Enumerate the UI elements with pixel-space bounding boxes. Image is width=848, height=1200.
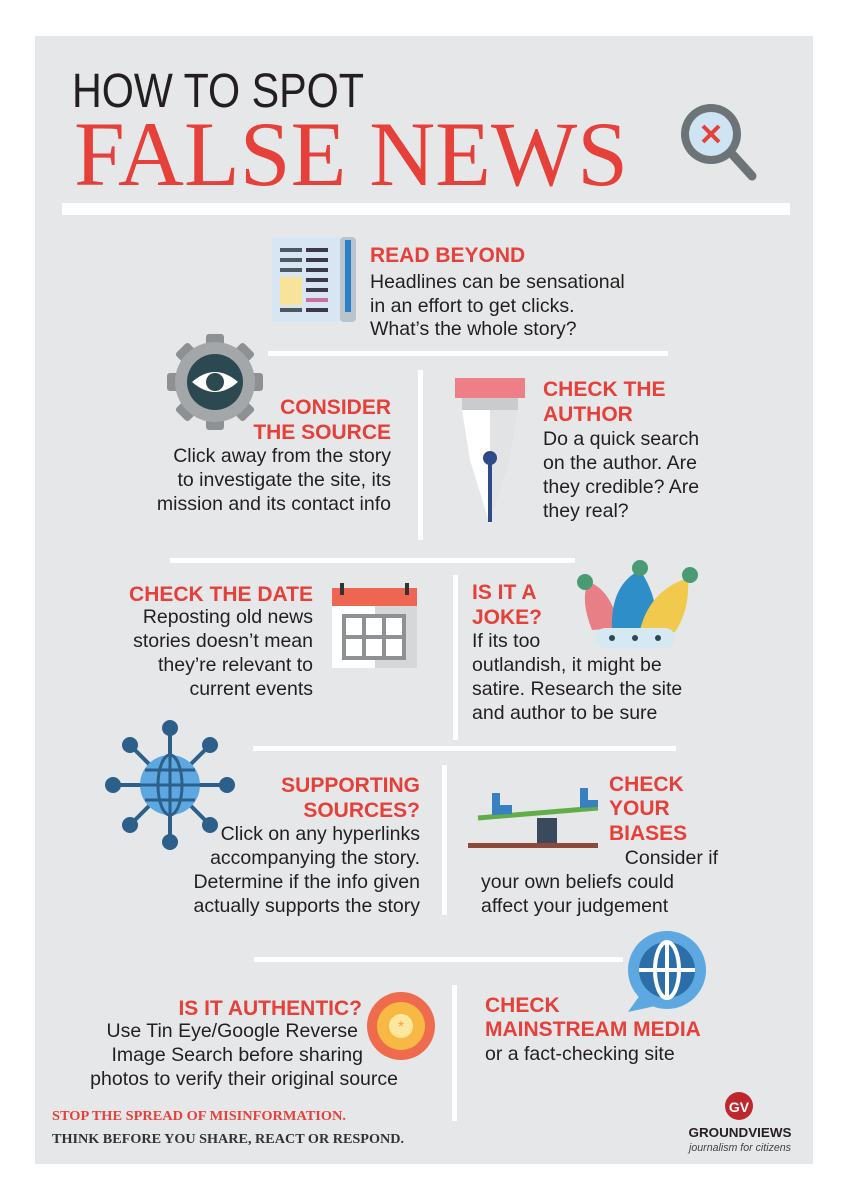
text: is it authentic: Image Search before sharing: [112, 1044, 363, 1066]
text: is it a joke: IS IT A: [472, 581, 537, 604]
text: check your biases: your own beliefs could: [481, 871, 674, 893]
text: is it a joke: If its too: [472, 630, 540, 652]
logo: groundviews: GROUNDVIEWS: [688, 1125, 792, 1140]
text: check your biases: Consider if: [625, 847, 719, 869]
text: consider the source: [157, 396, 391, 515]
icon: calendar: [332, 583, 417, 668]
text: is it authentic: Use Tin Eye/Google Reverse: [107, 1020, 358, 1042]
text: check mainstream media: CHECK: [485, 994, 560, 1017]
text: check the date: current events: [189, 678, 313, 700]
text: read beyond: What’s the whole story?: [370, 318, 577, 340]
text: check your biases: CHECK: [609, 773, 684, 796]
text: supporting sources: [193, 774, 420, 917]
icon: newspaper: [272, 237, 356, 322]
text: is it authentic: [90, 997, 398, 1090]
icon: pen nib: [455, 378, 525, 525]
text: check the date: Reposting old news: [143, 606, 313, 628]
text: consider the source: THE SOURCE: [253, 421, 391, 444]
text: check the author: they real?: [543, 500, 629, 522]
text: supporting sources: accompanying the story.: [210, 847, 420, 869]
text: consider the source: to investigate the site, its: [177, 469, 391, 491]
icon: jester hat: [577, 560, 698, 648]
text: consider the source: mission and its contact info: [157, 493, 391, 515]
text: check the date: stories doesn’t mean: [133, 630, 313, 652]
text: check the author: [543, 378, 699, 522]
text: check mainstream media: MAINSTREAM MEDIA: [485, 1018, 701, 1041]
logo: groundviews: [687, 1092, 792, 1154]
text: check your biases: BIASES: [609, 822, 687, 845]
text: read beyond: in an effort to get clicks.: [370, 295, 574, 317]
text: check the author: they credible? Are: [543, 476, 699, 498]
text: read beyond: READ BEYOND: [370, 244, 525, 267]
text: check the date: CHECK THE DATE: [129, 583, 313, 606]
text: read beyond: Headlines can be sensational: [370, 271, 625, 293]
text: is it a joke: outlandish, it might be: [472, 654, 662, 676]
icon: speech globe: [628, 931, 706, 1012]
icon: network globe: [105, 720, 235, 850]
text: is it authentic: photos to verify their original source: [90, 1068, 398, 1090]
icon: seesaw: [468, 788, 598, 848]
text: check the author: CHECK THE: [543, 378, 666, 401]
text: read beyond: [370, 244, 625, 340]
text: supporting sources: Determine if the info given: [193, 871, 420, 893]
text: check the author: on the author. Are: [543, 452, 697, 474]
title: FALSE NEWS: [74, 103, 628, 205]
text: check the author: Do a quick search: [543, 428, 699, 450]
icon: badge: [367, 992, 435, 1060]
footer text: STOP THE SPREAD OF MISINFORMATION.: [52, 1109, 346, 1124]
text: check the author: AUTHOR: [543, 403, 633, 426]
text: supporting sources: SUPPORTING: [281, 774, 420, 797]
text: check your biases: [481, 773, 719, 917]
logo: groundviews: journalism for citizens: [687, 1142, 791, 1154]
footer text: THINK BEFORE YOU SHARE, REACT OR RESPOND.: [52, 1132, 404, 1147]
text: check the date: they’re relevant to: [158, 654, 313, 676]
text: is it a joke: [472, 581, 682, 724]
text: is it a joke: satire. Research the site: [472, 678, 682, 700]
text: check your biases: affect your judgement: [481, 895, 669, 917]
text: consider the source: CONSIDER: [280, 396, 391, 419]
icon: badge: *: [398, 1019, 404, 1036]
text: consider the source: Click away from the story: [173, 445, 391, 467]
icon: gear eye: [167, 334, 263, 430]
text: supporting sources: Click on any hyperlinks: [221, 823, 420, 845]
text: check your biases: YOUR: [609, 797, 670, 820]
text: is it a joke: and author to be sure: [472, 702, 657, 724]
text: check mainstream media: or a fact-checking site: [485, 1043, 675, 1065]
text: supporting sources: SOURCES?: [303, 799, 420, 822]
footer text: [52, 1109, 404, 1147]
text: check mainstream media: [485, 994, 701, 1065]
title: HOW TO SPOT: [72, 65, 364, 118]
text: supporting sources: actually supports the story: [193, 895, 420, 917]
text: is it a joke: JOKE?: [472, 606, 542, 629]
text: check the date: [129, 583, 313, 700]
icon: magnifier: [681, 104, 752, 176]
logo: groundviews: GV: [729, 1099, 750, 1115]
text: is it authentic: IS IT AUTHENTIC?: [178, 997, 362, 1020]
